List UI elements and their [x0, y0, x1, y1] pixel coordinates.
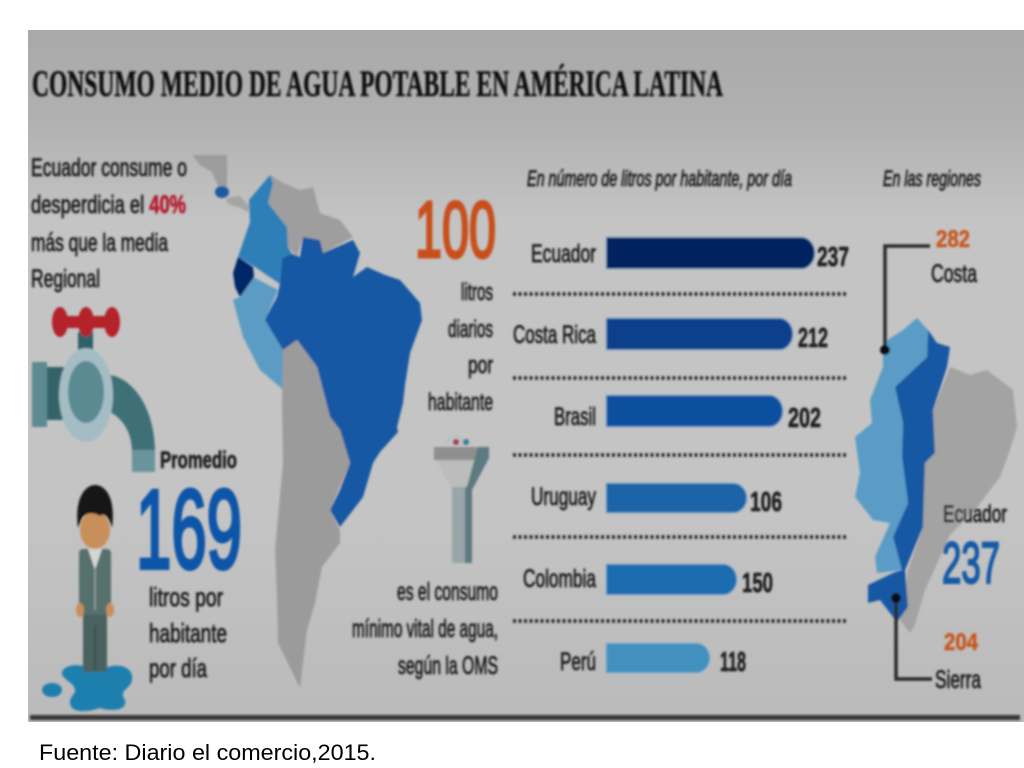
bar chart [513, 237, 849, 677]
map region: Brazil [263, 237, 422, 527]
row: Costa Rica [513, 318, 828, 353]
callout: Sierra [891, 593, 981, 694]
row: Colombia: Colombia [523, 565, 596, 593]
callout: Costa: Costa [931, 260, 977, 288]
icon: person standing in puddle [42, 485, 132, 711]
row: Uruguay [531, 483, 782, 517]
puddle [62, 665, 132, 711]
label: Ecuador 237 [942, 501, 1007, 596]
text block: litros diarios por habitante: litros [461, 279, 493, 306]
row: Uruguay: Uruguay [531, 483, 596, 511]
text block: litros diarios por habitante: habitante [428, 389, 493, 416]
row: Brasil: Brasil [554, 403, 596, 431]
row: Uruguay: 106 [750, 486, 782, 517]
text block: OMS minimum: según la OMS [398, 652, 498, 680]
text block: OMS minimum [352, 578, 498, 680]
number: 100 liters: 100 [415, 185, 496, 274]
text block: Ecuador consumption: más que la media [31, 229, 168, 257]
callout: Sierra: Sierra [935, 666, 981, 694]
number: 169 liters: 169 [136, 467, 242, 592]
row: Brasil: 202 [788, 402, 821, 433]
bottom rule [30, 715, 1020, 720]
map: South America [192, 155, 422, 688]
text block: OMS minimum: es el consumo [397, 578, 498, 606]
text block: Ecuador consumption: Regional [31, 265, 100, 293]
callout: Sierra: 204 [944, 629, 979, 656]
text block: litros diarios por habitante: por [468, 352, 493, 379]
text block: litros por habitante por dia: litros por [149, 582, 223, 612]
text block: OMS minimum: mínimo vital de agua, [352, 615, 498, 643]
row: Colombia [523, 564, 773, 598]
callout: Costa: 282 [936, 226, 970, 253]
text block: litros por habitante por dia: por día [149, 653, 207, 683]
icon: faucet [32, 307, 155, 472]
map region: Mexico [192, 155, 227, 187]
map region: Venezuela and Guianas [268, 175, 353, 257]
region: Costa [855, 318, 928, 573]
text block: litros diarios por habitante [428, 279, 493, 416]
text block: Ecuador consumption: desperdicia el 40% [31, 191, 186, 219]
map region: Central America [226, 196, 250, 212]
source note: Fuente: Diario el comercio,2015. [39, 740, 376, 765]
row: Brasil [554, 395, 821, 433]
row: Ecuador: Ecuador [531, 240, 596, 268]
text block: Ecuador consumption: Ecuador consume o [31, 154, 187, 182]
map region: Southern Cone [275, 340, 350, 688]
text block: litros por habitante por dia [149, 582, 227, 683]
row: Costa Rica: Costa Rica [513, 321, 596, 349]
row: Peru [560, 643, 746, 677]
row: Ecuador [531, 237, 849, 272]
text block: litros por habitante por dia: habitante [149, 618, 227, 648]
text block: litros diarios por habitante: diarios [448, 316, 493, 343]
region: Amazon [900, 367, 1017, 633]
drop [42, 683, 62, 697]
label: Promedio: Promedio [160, 447, 237, 474]
map region: Peru [233, 277, 287, 393]
row: Peru: Perú [560, 648, 596, 676]
map: Ecuador regions [855, 318, 1017, 633]
text block: Ecuador consumption [31, 154, 187, 293]
row: Colombia: 150 [742, 567, 773, 598]
row: Ecuador: 237 [817, 241, 849, 272]
row: Costa Rica: 212 [798, 322, 828, 353]
map region: Ecuador [233, 257, 254, 297]
map region: Costa Rica [215, 186, 229, 198]
icon: sink [434, 436, 489, 563]
map region: Colombia [238, 175, 292, 284]
region: Sierra [868, 330, 950, 622]
callout: Costa [880, 226, 977, 355]
row: Peru: 118 [720, 646, 746, 677]
chart heading: En número de litros por habitante, por día [527, 166, 792, 191]
